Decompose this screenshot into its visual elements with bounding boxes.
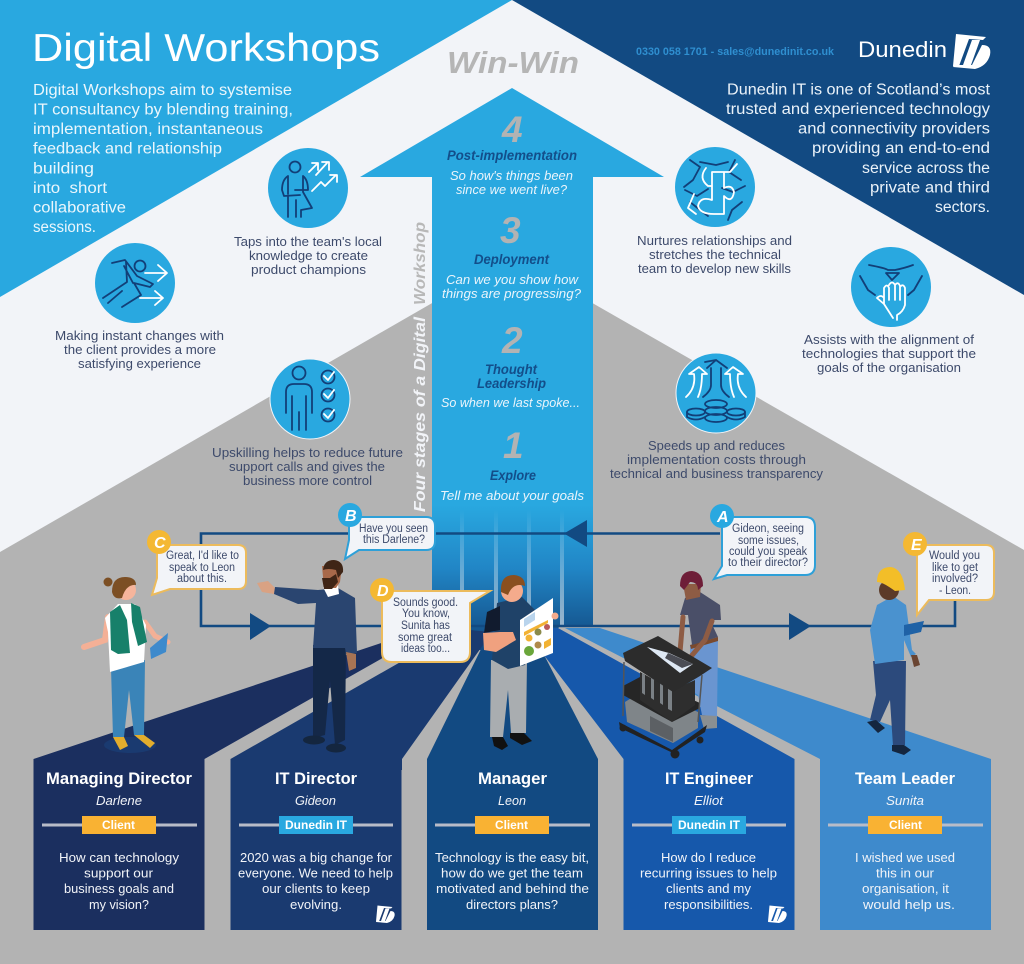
icon: running figure bbox=[95, 243, 175, 323]
bubble A: Gideon, seeing bbox=[732, 523, 804, 535]
card: IT Engineer bbox=[624, 759, 794, 930]
stage 3: 3 bbox=[500, 210, 521, 251]
stage 2: Leadership bbox=[477, 376, 546, 391]
intro text right: service across the bbox=[862, 160, 990, 177]
bubble D: some great bbox=[398, 632, 453, 644]
stage 2: So when we last spoke... bbox=[441, 395, 580, 410]
background: light blue left header bbox=[0, 0, 512, 300]
caption: upskilling: business more control bbox=[243, 473, 372, 488]
card: IT Director: our clients to keep bbox=[262, 881, 370, 896]
stage 4: Post-implementation bbox=[447, 148, 577, 163]
card: IT Engineer: Elliot bbox=[694, 793, 724, 808]
caption: instant changes: the client provides a more bbox=[64, 342, 216, 357]
icon: champion figure bbox=[268, 148, 348, 228]
bubble D bbox=[370, 578, 490, 662]
stage 1 bbox=[440, 425, 584, 503]
bubble E: - Leon. bbox=[939, 585, 971, 597]
card: Managing Director: Managing Director bbox=[46, 770, 193, 788]
caption: alignment: goals of the organisation bbox=[817, 360, 961, 375]
intro text right: Dunedin IT is one of Scotland’s most bbox=[727, 82, 991, 98]
bubble D: Sounds good. bbox=[393, 597, 458, 609]
card: Team Leader bbox=[820, 759, 991, 930]
floor path: Manager bbox=[427, 632, 598, 770]
caption: alignment: technologies that support the bbox=[802, 346, 976, 361]
caption: instant changes: Making instant changes with bbox=[55, 328, 224, 343]
card: IT Director: everyone. We need to help bbox=[238, 866, 393, 880]
caption: local knowledge: product champions bbox=[251, 262, 367, 277]
caption: relationships bbox=[637, 233, 792, 276]
Dunedin wordmark: Dunedin bbox=[858, 37, 947, 62]
Dunedin logo mark bbox=[953, 34, 990, 69]
stage 2: 2 bbox=[501, 320, 523, 361]
intro text left: into short bbox=[33, 180, 108, 197]
caption: speeds up: implementation costs through bbox=[627, 452, 806, 467]
floor path: IT Engineer bbox=[540, 628, 794, 770]
intro text left: IT consultancy by blending training, bbox=[33, 102, 293, 118]
stage 2 bbox=[441, 320, 580, 410]
caption: instant changes bbox=[55, 328, 224, 371]
intro text right: sectors. bbox=[935, 199, 990, 216]
bubble C bbox=[147, 530, 246, 595]
caption: local knowledge: Taps into the team's local bbox=[234, 234, 382, 249]
caption: speeds up bbox=[610, 438, 824, 481]
arrow stripes bbox=[460, 510, 564, 625]
stage 4: So how's things been bbox=[450, 168, 573, 183]
person: Sunita bbox=[867, 567, 924, 755]
caption: relationships: stretches the technical bbox=[649, 247, 781, 262]
person: Darlene bbox=[84, 577, 168, 753]
caption: upskilling: support calls and gives the bbox=[229, 459, 385, 474]
bubble E: E bbox=[911, 537, 923, 554]
card: IT Engineer: recurring issues to help bbox=[640, 866, 777, 880]
icon: arrows and coins bbox=[676, 353, 756, 433]
card: Manager bbox=[427, 759, 598, 930]
bubble C: C bbox=[154, 535, 166, 552]
icon: joined hands bbox=[851, 247, 931, 327]
caption: alignment: Assists with the alignment of bbox=[804, 332, 974, 347]
intro text right bbox=[726, 82, 991, 216]
card: Managing Director bbox=[34, 759, 204, 930]
card: IT Engineer: clients and my bbox=[666, 881, 752, 896]
floor path: IT Director bbox=[230, 630, 490, 770]
bubble C: about this. bbox=[177, 573, 227, 585]
card: Manager: Leon bbox=[498, 793, 526, 808]
caption: speeds up: technical and business transparency bbox=[610, 466, 824, 481]
stage 3 bbox=[442, 210, 582, 301]
caption: relationships: team to develop new skills bbox=[638, 261, 791, 276]
card: Manager: Client bbox=[495, 818, 528, 832]
card: Team Leader: Sunita bbox=[886, 793, 924, 808]
card: Manager: directors plans? bbox=[466, 897, 558, 912]
bubble D: You know, bbox=[402, 608, 450, 620]
stage 3: Can we you show how bbox=[446, 272, 580, 287]
card: Manager: Manager bbox=[478, 770, 548, 788]
bubble D: ideas too... bbox=[401, 643, 450, 655]
bubble E: Would you bbox=[929, 550, 980, 562]
card: Team Leader: organisation, it bbox=[862, 881, 949, 896]
card: IT Engineer: IT Engineer bbox=[665, 770, 754, 788]
caption: relationships: Nurtures relationships and bbox=[637, 233, 792, 248]
stage 4: since we went live? bbox=[456, 182, 568, 197]
caption: speeds up: Speeds up and reduces bbox=[648, 438, 785, 453]
caption: upskilling bbox=[212, 445, 403, 488]
vertical label: four stages bbox=[412, 222, 429, 512]
card: Team Leader: would help us. bbox=[862, 897, 955, 912]
stage 1: Tell me about your goals bbox=[440, 488, 584, 503]
person: Elliot with cart bbox=[619, 571, 721, 758]
bubble D: Sunita has bbox=[401, 620, 450, 632]
contact details: 0330 058 1701 - sales@dunedinit.co.uk bbox=[636, 46, 835, 58]
stage 3: things are progressing? bbox=[442, 286, 582, 301]
bubble B: this Darlene? bbox=[363, 534, 425, 546]
flow arrowhead right pointing middle bbox=[250, 613, 271, 640]
card: IT Director: Dunedin IT bbox=[285, 818, 348, 832]
bubble D: D bbox=[377, 583, 389, 600]
bubble E: involved? bbox=[932, 573, 978, 585]
intro text left: collaborative bbox=[33, 200, 126, 216]
intro text left: sessions. bbox=[33, 219, 96, 236]
card: Managing Director: Client bbox=[102, 818, 135, 832]
card: Team Leader: I wished we used bbox=[855, 850, 955, 865]
stage 2: Thought bbox=[485, 362, 537, 377]
vertical label: four stages: Workshop bbox=[412, 222, 429, 305]
intro text left: implementation, instantaneous bbox=[33, 121, 263, 138]
bubble E: like to get bbox=[932, 562, 979, 574]
card: Managing Director: business goals and bbox=[64, 881, 174, 896]
card: Managing Director: my vision? bbox=[89, 897, 149, 912]
bubble A: A bbox=[716, 509, 729, 526]
caption: instant changes: satisfying experience bbox=[78, 356, 201, 371]
intro text right: providing an end-to-end bbox=[812, 140, 990, 157]
card: IT Engineer: responsibilities. bbox=[664, 897, 753, 912]
card: Managing Director: Darlene bbox=[96, 793, 142, 808]
caption: local knowledge: knowledge to create bbox=[249, 248, 368, 263]
card: Manager: motivated and behind the bbox=[436, 881, 589, 896]
intro text right: trusted and experienced technology bbox=[726, 101, 990, 118]
stage 1: 1 bbox=[503, 425, 524, 466]
card: IT Director: 2020 was a big change for bbox=[240, 850, 393, 865]
bubble A: some issues, bbox=[738, 535, 799, 547]
bubble C: Great, I'd like to bbox=[166, 550, 239, 562]
stage 3: Deployment bbox=[474, 252, 549, 267]
grey lower house bbox=[0, 257, 1024, 964]
intro text left bbox=[33, 82, 293, 236]
card: Team Leader: Team Leader bbox=[855, 770, 956, 788]
card: IT Director bbox=[230, 759, 402, 930]
flow arrowhead left pointing bbox=[564, 520, 587, 547]
card: IT Director: evolving. bbox=[290, 897, 342, 912]
caption: local knowledge bbox=[234, 234, 382, 277]
small logo mark bbox=[768, 906, 787, 923]
flow line between roles bbox=[201, 534, 955, 626]
stage 4: 4 bbox=[501, 109, 523, 150]
floor path: Managing Director bbox=[34, 626, 432, 770]
title: Digital Workshops bbox=[32, 27, 380, 70]
card: IT Director: IT Director bbox=[275, 770, 358, 788]
intro text left: Digital Workshops aim to systemise bbox=[33, 82, 292, 99]
icon: puzzle bbox=[675, 147, 755, 227]
small logo mark bbox=[376, 906, 395, 923]
flow arrowhead right pointing far bbox=[789, 613, 811, 640]
intro text left: feedback and relationship bbox=[33, 140, 222, 158]
person: Leon with poster bbox=[483, 575, 558, 750]
person: Gideon bbox=[257, 560, 357, 752]
card: Team Leader: Client bbox=[889, 818, 922, 832]
bubble A: could you speak bbox=[729, 546, 807, 558]
bubble B: Have you seen bbox=[359, 523, 428, 535]
stage 4 bbox=[447, 109, 577, 197]
caption: upskilling: Upskilling helps to reduce future bbox=[212, 445, 403, 460]
intro text right: and connectivity providers bbox=[798, 120, 990, 138]
background: dark blue right header bbox=[512, 0, 1024, 300]
card: Manager: how do we get the team bbox=[441, 866, 583, 880]
card: Managing Director: How can technology bbox=[59, 850, 180, 865]
intro text left: building bbox=[33, 160, 94, 178]
caption: alignment bbox=[802, 332, 976, 375]
icon: person with checklist bbox=[270, 359, 350, 439]
Win-Win heading: Win-Win bbox=[447, 45, 579, 80]
card: Manager: Technology is the easy bit, bbox=[435, 850, 589, 865]
bubble E bbox=[903, 532, 994, 615]
card: IT Engineer: Dunedin IT bbox=[678, 818, 741, 832]
bubble A bbox=[710, 504, 815, 579]
card: Managing Director: support our bbox=[84, 866, 154, 880]
vertical label: four stages: Four stages of a Digital bbox=[412, 316, 429, 512]
card: Team Leader: this in our bbox=[876, 866, 935, 880]
bubble B bbox=[338, 503, 435, 559]
bubble A: to their director? bbox=[728, 557, 808, 569]
card: IT Director: Gideon bbox=[295, 793, 336, 808]
bubble B: B bbox=[345, 508, 357, 525]
intro text right: private and third bbox=[870, 180, 990, 196]
floor path: Team Leader bbox=[565, 628, 991, 770]
bubble C: speak to Leon bbox=[169, 562, 235, 574]
stage 1: Explore bbox=[490, 468, 536, 483]
central arrow: four stages bbox=[360, 88, 664, 650]
card: IT Engineer: How do I reduce bbox=[661, 850, 756, 865]
